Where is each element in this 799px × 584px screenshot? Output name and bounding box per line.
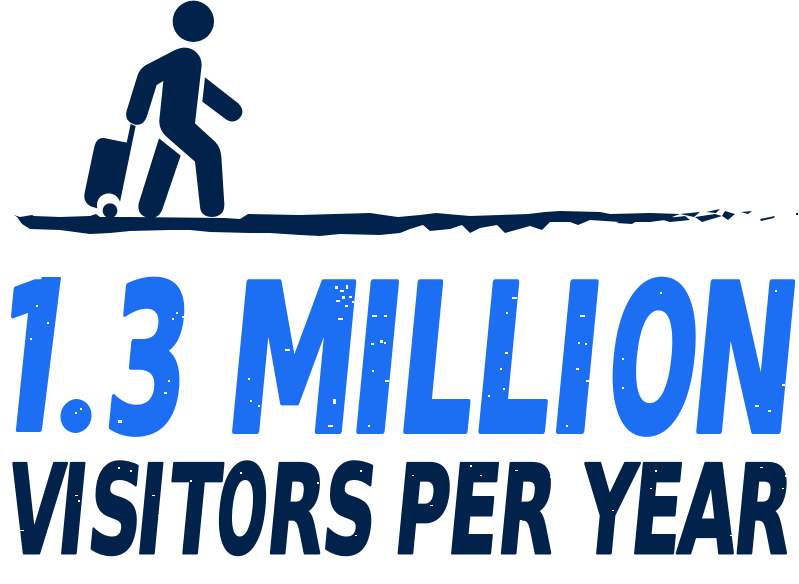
numeral 1 and decimal point shapes — [0, 277, 96, 438]
headline: 1.3 million: O — [598, 242, 709, 480]
headline: 1.3 million: I — [342, 242, 413, 480]
subheading: visitors per year: E — [442, 441, 506, 583]
subheading: visitors per year: P — [389, 441, 457, 583]
headline: 1.3 million: I — [541, 242, 613, 480]
headline: 1.3 million: 3 — [98, 242, 201, 480]
subheading: visitors per year: E — [625, 441, 689, 583]
subheading: visitors per year: S — [317, 441, 384, 583]
subheading: visitors per year: O — [210, 441, 274, 583]
subheading: visitors per year: V — [1, 441, 70, 583]
subheading: visitors per year: Y — [574, 441, 642, 583]
subheading: visitors per year: I — [130, 441, 171, 583]
subheading: visitors per year: R — [492, 441, 563, 583]
subheading: visitors per year: R — [261, 441, 332, 583]
subheading: visitors per year — [1, 441, 798, 583]
texture: speckles on subheading — [20, 465, 787, 536]
subheading: visitors per year: I — [52, 441, 93, 583]
headline: 1.3 million: L — [464, 242, 565, 480]
icon: walking traveller with suitcase — [84, 1, 242, 218]
subheading: visitors per year: A — [673, 441, 744, 583]
headline: 1.3 million: M — [217, 242, 370, 480]
subheading: visitors per year: T — [162, 441, 226, 583]
headline: 1.3 million — [0, 242, 799, 480]
subheading: visitors per year: R — [728, 441, 798, 583]
ground line: rough brush stroke — [14, 209, 798, 236]
headline: 1.3 million: L — [390, 242, 487, 480]
subheading: visitors per year: S — [82, 441, 149, 583]
texture: speckles on headline — [30, 285, 785, 427]
headline: 1.3 million: . — [42, 242, 115, 480]
